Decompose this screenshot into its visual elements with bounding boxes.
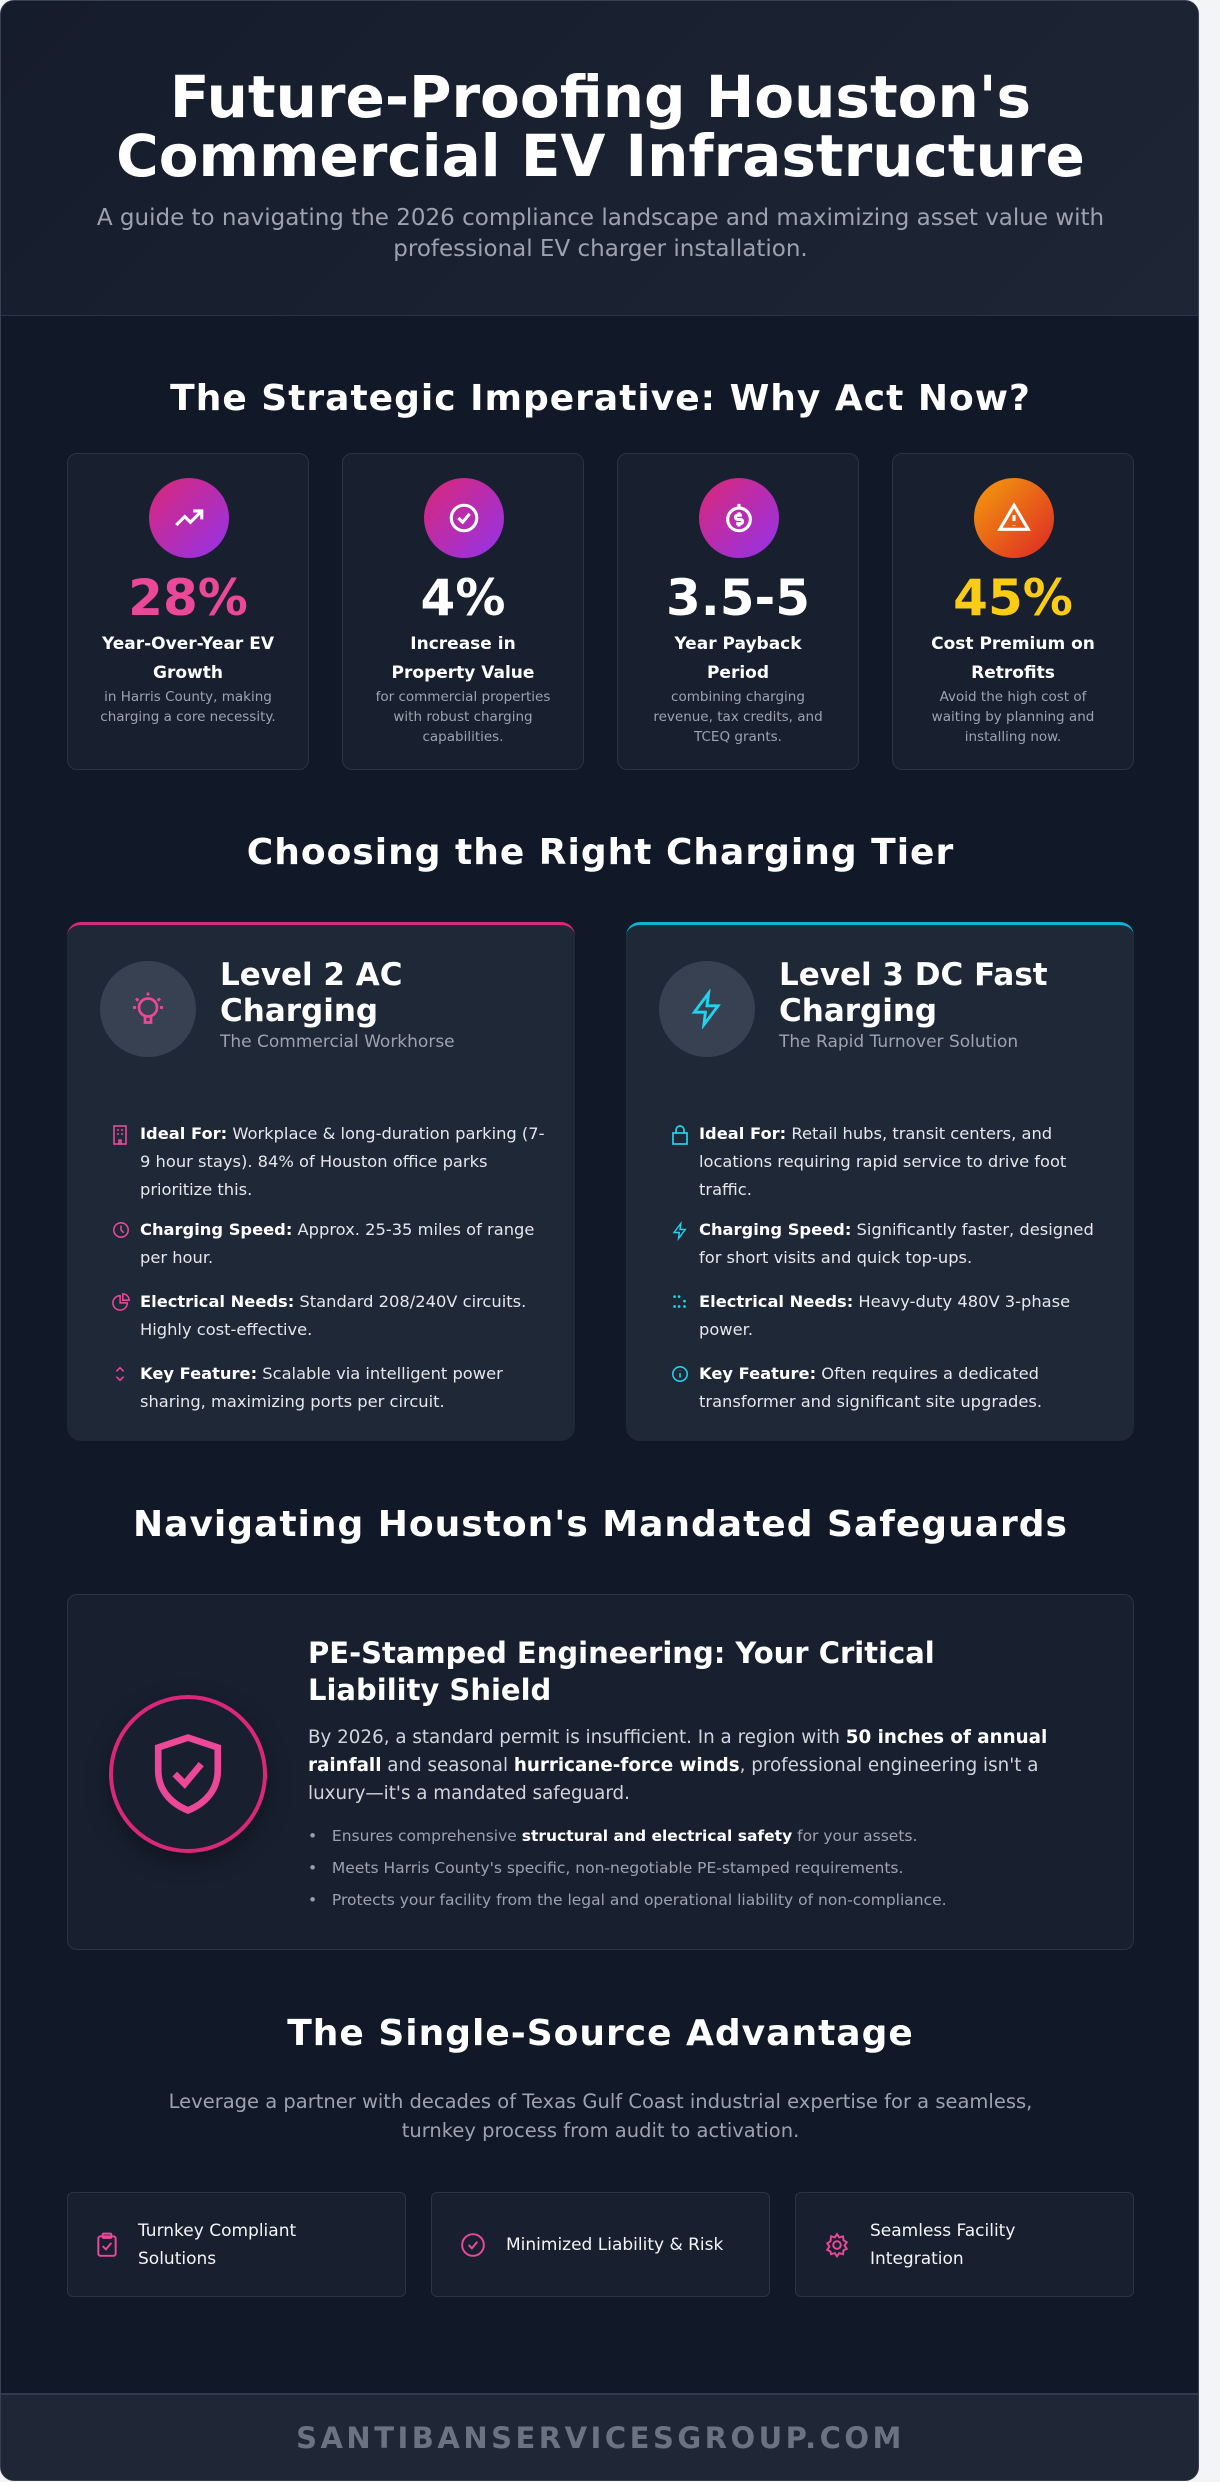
subtext: Leverage a partner with decades of Texas Gulf Coast industrial expertise for a seamless, turnkey process from audit to activation. [169,2090,1032,2142]
icon: money [699,478,779,558]
stat card: 28%: 28% [128,569,248,627]
stat card: 4%: Increase in Property Value [392,634,534,683]
stat card: payback: Year Payback Period [674,634,802,683]
stat card: payback [617,453,859,770]
panel: level 3: Charging [779,993,937,1029]
panel: level 2 [67,922,575,1441]
icon: bulb [100,961,196,1057]
feature: integration: Integration [870,2248,964,2268]
bullet list: • Meets Harris County's specific, non-negotiable PE-stamped requirements. [308,1859,903,1877]
paragraph: By 2026, a standard permit is insufficient. In a region with 50 inches of annual rainfall and seasonal hurricane-force winds, professional engineering isn't a luxury—it's a mandated safeguard. [308,1727,1047,1804]
item: Electrical Needs: Heavy-duty 480V 3-phase power. [699,1292,1070,1339]
item: Key Feature: Scalable via intelligent power sharing, maximizing ports per circuit. [140,1364,503,1411]
item: Ideal For: Retail hubs, transit centers, and locations requiring rapid service to drive foot traffic. [699,1124,1066,1199]
feature: integration: Seamless Facility [870,2220,1015,2240]
stat card: 4% [342,453,584,770]
stat card: 45% [892,453,1134,770]
icon: check [424,478,504,558]
icon: trend [149,478,229,558]
header [1,1,1200,316]
feature: turnkey [67,2192,406,2297]
item: Ideal For: Workplace & long-duration parking (7-9 hour stays). 84% of Houston office parks prioritize this. [140,1124,545,1199]
footer [1,2393,1200,2482]
bullet list: • Protects your facility from the legal and operational liability of non-compliance. [308,1891,947,1909]
item: Key Feature: Often requires a dedicated transformer and significant site upgrades. [699,1364,1042,1411]
feature: liability [431,2192,770,2297]
stat card: 45%: Cost Premium on Retrofits [931,634,1095,683]
title [116,63,1085,190]
stat card: 45%: Avoid the high cost of waiting by planning and installing now. [932,689,1094,745]
title [308,1636,935,1707]
icon: bolt [659,961,755,1057]
title: Liability Shield [308,1673,551,1707]
feature: turnkey: Turnkey Compliant [138,2220,296,2240]
bullet list: • Ensures comprehensive structural and electrical safety for your assets. [308,1827,917,1845]
feature: integration [795,2192,1134,2297]
stat card: payback: 3.5-5 [666,569,810,627]
subtitle: A guide to navigating the 2026 compliance landscape and maximizing asset value with professional EV charger installation. [97,205,1104,262]
heading: charging tier: Choosing the Right Charging Tier [247,832,954,873]
panel: level 3 [626,922,1134,1441]
icon: shield [109,1695,267,1853]
stat card: 28%: Year-Over-Year EV Growth [102,634,274,683]
title: PE-Stamped Engineering: Your Critical [308,1636,935,1670]
heading: single source: The Single-Source Advantage [287,2013,914,2054]
panel: level 2: The Commercial Workhorse [220,1032,455,1052]
item: Charging Speed: Significantly faster, designed for short visits and quick top-ups. [699,1220,1094,1267]
title: Commercial EV Infrastructure [116,122,1085,190]
feature: liability: Minimized Liability & Risk [506,2234,723,2254]
heading: safeguards: Navigating Houston's Mandated Safeguards [133,1504,1068,1545]
stat card: payback: combining charging revenue, tax credits, and TCEQ grants. [653,689,823,745]
stat card: 4%: 4% [421,569,505,627]
footer: SANTIBANSERVICESGROUP.COM [296,2421,905,2455]
panel: level 3: Level 3 DC Fast [779,957,1048,993]
title: Future-Proofing Houston's [170,63,1031,131]
bullet list [308,1827,947,1909]
feature: turnkey: Solutions [138,2248,216,2268]
stat card: 28% [67,453,309,770]
stat card: 4%: for commercial properties with robust charging capabilities. [376,689,550,745]
stat card: 28%: in Harris County, making charging a core necessity. [100,689,276,725]
panel: level 2: Level 2 AC [220,957,403,993]
stat card: 45%: 45% [953,569,1073,627]
icon: warning [974,478,1054,558]
panel: PE-stamped [67,1594,1134,1950]
heading: why act now: The Strategic Imperative: Why Act Now? [170,378,1031,419]
item: Charging Speed: Approx. 25-35 miles of range per hour. [140,1220,534,1267]
panel: level 3: The Rapid Turnover Solution [779,1032,1018,1052]
item: Electrical Needs: Standard 208/240V circuits. Highly cost-effective. [140,1292,526,1339]
panel: level 2: Charging [220,993,378,1029]
